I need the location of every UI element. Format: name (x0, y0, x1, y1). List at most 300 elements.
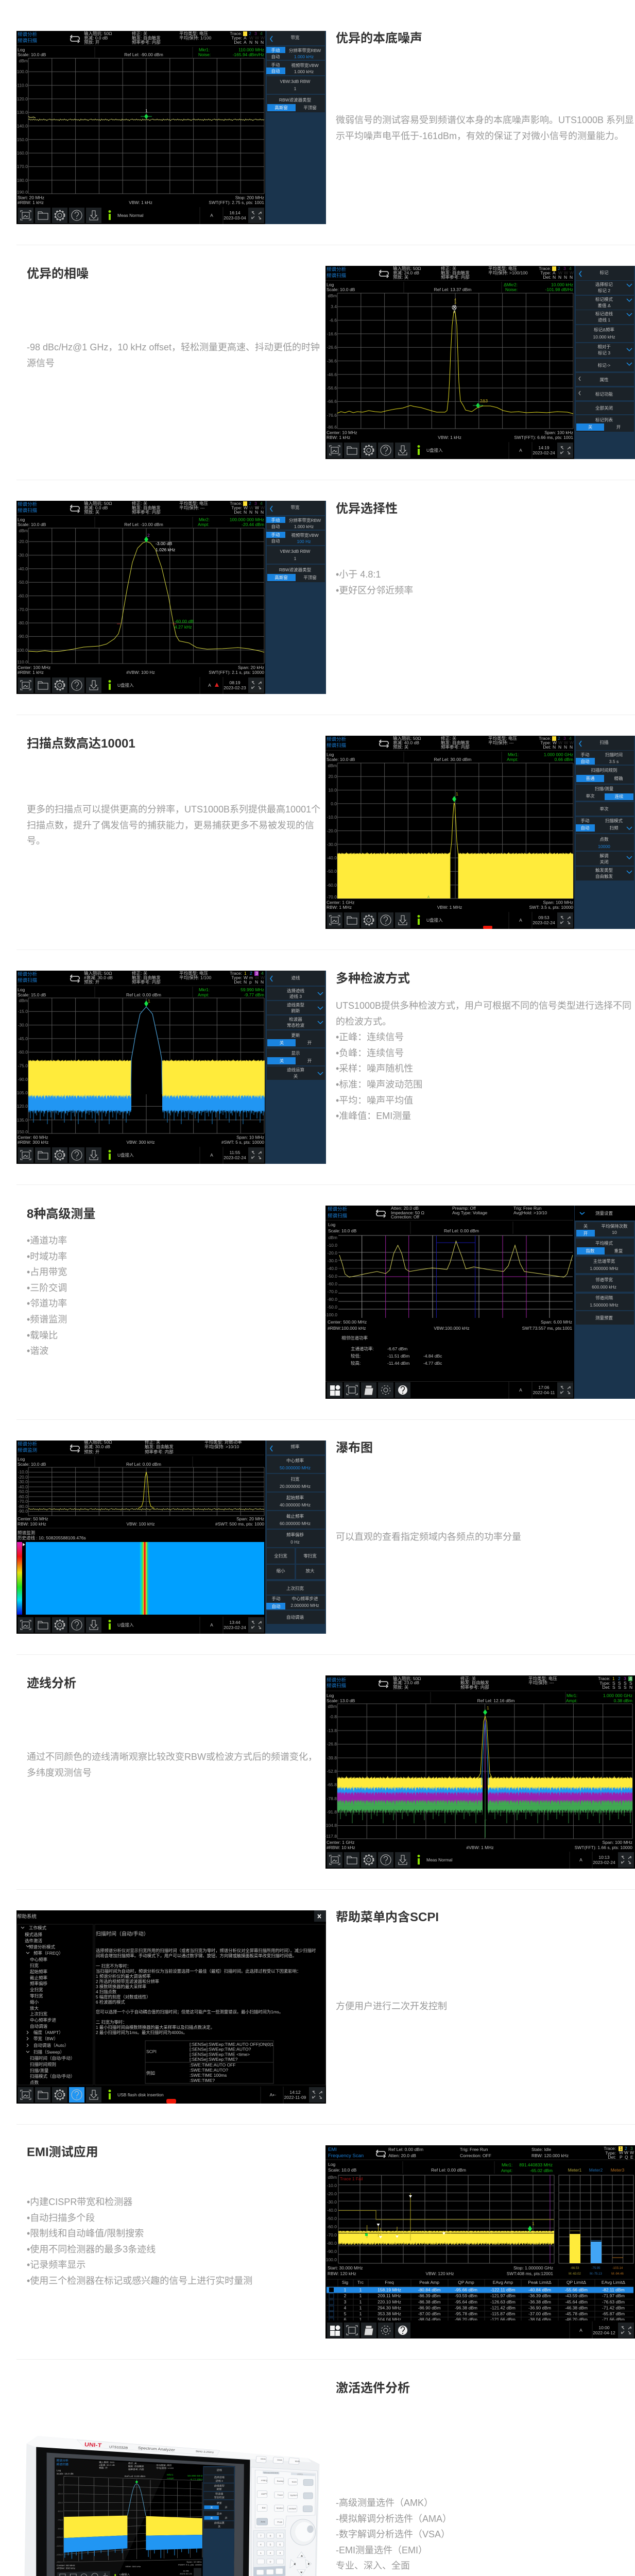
sidebar menu: 常态检波 (287, 1023, 304, 1028)
sidebar menu: 自动 (271, 524, 280, 529)
product screen sidebar: 显示 (217, 2513, 222, 2515)
header status: 修正: 关 (460, 1676, 476, 1681)
readout row (327, 1693, 632, 1703)
toolbar: 10:00 (598, 2325, 610, 2330)
header status: 输入阻抗: 50Ω (84, 31, 112, 36)
sidebar menu (574, 736, 635, 929)
spectrum plot: 1 (145, 108, 148, 113)
help tree: 扫描时间（自动/手动） (30, 2056, 75, 2061)
bottom readout: Start: 20 MHz (18, 195, 44, 200)
header status: 输入阻抗: 50Ω (393, 1676, 421, 1681)
header status: 频谱扫描 (18, 507, 38, 514)
help title bar: 帮助系统 (17, 1913, 37, 1920)
header status: W (619, 2150, 623, 2155)
header status: W (564, 740, 568, 745)
signal table: -71.42 dBm (602, 2305, 625, 2310)
help article: 2 最小扫描时间为1ms。最大扫描时间为4000s。 (96, 2030, 187, 2035)
header status (16, 1439, 264, 1467)
spectrum plot: 2Δ3 (480, 398, 488, 403)
header status (16, 31, 265, 58)
front keypad panel: Meas (261, 2458, 266, 2460)
sidebar menu: 频率偏移 (286, 1532, 304, 1537)
front keypad panel: Utility (297, 2473, 303, 2475)
toolbar (327, 2321, 634, 2338)
toolbar (327, 442, 573, 459)
spectrum plot with limit line: Trace 1 Fail (340, 2176, 363, 2181)
help article: 选择频谱分析仪对显示扫宽所用的扫描时间（或者当扫宽为零时，频谱分析仪对全屏幕扫描所用的时间）。减少扫描时 (96, 1948, 316, 1953)
sidebar menu: 属性 (599, 377, 609, 382)
spectrum plot: -3.00 dB (156, 541, 172, 546)
sidebar menu: 检波器 (289, 1017, 302, 1022)
bottom readout: 频谱监测 (18, 1530, 35, 1535)
toolbar: 16:14 (229, 210, 241, 215)
header status: Type: (231, 35, 242, 40)
help tree: 零扫宽 (30, 1993, 43, 1998)
toolbar: 2023-02-24 (533, 920, 555, 925)
signal table: Freq (385, 2280, 394, 2285)
header status: W (261, 35, 265, 40)
section 2 heading: 优异的相噪 (27, 267, 89, 281)
help tree: 模式选择 (25, 1932, 43, 1937)
product screen header text: Ref Lel: 0.00 dBm (125, 2476, 146, 2478)
brand plate: 9kHz-3.2GHz (196, 2450, 214, 2454)
toolbar: A (519, 448, 522, 453)
sidebar menu (574, 1206, 635, 1399)
product screen sidebar: 开 (225, 2517, 228, 2520)
bottom readout: #RBW: 1 kHz (18, 670, 44, 675)
help article: 4 扫描点数 (96, 1989, 117, 1994)
header status: 平均|保持: --- (488, 740, 514, 745)
spectrum plot: 4.27 kHz (175, 624, 192, 630)
front keypad panel: BW (262, 2506, 266, 2509)
help tree: 幅度（AMPT） (33, 2030, 63, 2035)
product screen spectrum: -60.0 (57, 2510, 63, 2512)
header status: Ref Lel: 0.00 dBm (388, 2147, 423, 2152)
spectrum plot: -90.0 (18, 1077, 28, 1082)
header status (325, 1206, 573, 1234)
header status: 频谱扫描 (327, 742, 347, 749)
toolbar: 2023-03-04 (224, 215, 246, 221)
front keypad panel: 1 (260, 2552, 262, 2555)
sidebar menu: 10 (612, 1230, 617, 1235)
toolbar (18, 1147, 264, 1164)
readout row: Log (328, 2162, 335, 2167)
header status: S (618, 1685, 621, 1690)
product screen header text: Log (57, 2469, 61, 2471)
toolbar: USB flash disk insertion (117, 2092, 164, 2097)
ACPR plot: -30.0 (328, 1258, 337, 1263)
sidebar menu: 主信道带宽 (593, 1259, 615, 1264)
signal table: -45.78 dBm (565, 2311, 588, 2316)
readout row: 891.440833 MHz (519, 2162, 553, 2167)
header status: 2 (625, 2146, 627, 2151)
header status: Type: (599, 1681, 610, 1686)
readout row (18, 1456, 161, 1467)
header status: 频谱扫描 (327, 1683, 347, 1689)
section 11 heading: 激活选件分析 (336, 2381, 410, 2395)
sidebar menu: 100 Hz (297, 539, 311, 544)
help article: 二 扫宽为零时： (96, 2020, 127, 2025)
section 1 heading: 优异的本底噪声 (336, 31, 422, 45)
signal table: -46.38 dBm (565, 2305, 588, 2310)
sidebar menu (574, 266, 635, 459)
header status: 平均|保持: 1/100 (179, 35, 211, 40)
sidebar menu: 1.000 kHz (294, 69, 314, 74)
sidebar menu: 标记 2 (598, 288, 610, 293)
sidebar menu: 自由触发 (595, 874, 613, 879)
signal table: -40.84 dBm (528, 2287, 551, 2293)
readout row: Ref Lel: 0.00 dBm (431, 2167, 466, 2173)
spectrum plot: dBm (19, 528, 28, 533)
spectrum plot: -39.8 (327, 1755, 337, 1760)
SCPI table: [:SENSe]:SWEep:TIME:AUTO? (190, 2046, 251, 2052)
spectrum plot: -56.6 (327, 385, 337, 391)
header status: 频率参考: 内部 (145, 1449, 174, 1454)
signal table: 2 (344, 2293, 347, 2298)
spectrum plot: -46.6 (327, 372, 337, 377)
sidebar menu: 解调 (599, 853, 609, 858)
product screen header text: 修正: 关 (128, 2462, 137, 2465)
screen: phase noise (325, 266, 635, 459)
bottom readout: SWT:408 ms, pts:12001 (507, 2271, 553, 2276)
header status: 1 (620, 2146, 622, 2151)
header status: A (553, 270, 556, 275)
readout row: Mkr1: (199, 47, 210, 53)
header status (16, 501, 265, 528)
header status: 4 (260, 31, 263, 36)
sidebar menu: 标记列表 (595, 417, 613, 422)
header status: 频谱扫描 (328, 1213, 348, 1219)
signal table: -95.66 dBm (455, 2287, 477, 2293)
signal table: 158.19 MHz (377, 2287, 401, 2293)
bottom readout: #RBW: 300 kHz (18, 1140, 48, 1145)
header status: Trace: (604, 2146, 616, 2151)
header status: 修正: 关 (441, 736, 457, 741)
header status: 平均|保持: --- (179, 505, 205, 510)
sidebar menu: 迹线运算 (287, 1067, 304, 1073)
sidebar menu: 手动 (271, 1596, 281, 1601)
header status: 频谱分析 (328, 1206, 348, 1212)
header status: 修正: 关 (441, 266, 457, 271)
header status: S (624, 1685, 627, 1690)
signal table: 1 (359, 2293, 362, 2298)
bottom readout: Center: 1 GHz (327, 1840, 354, 1845)
header status (325, 2146, 635, 2174)
signal table: -43.59 dBm (565, 2293, 588, 2298)
header status: 频谱分析 (18, 1441, 38, 1447)
bottom readout: 历史迹线 : 10; 508205588109.476s (18, 1535, 86, 1540)
header status: Det: (543, 744, 551, 750)
signal table: -65.87 dBm (602, 2311, 625, 2316)
bottom readout: Span: 100 kHz (544, 430, 573, 435)
header status: 预放: 开 (84, 979, 100, 985)
toolbar: 08:19 (229, 680, 241, 685)
header status: N (255, 510, 258, 515)
signal table: -126.63 dBm (490, 2299, 516, 2304)
readout row: Ref Lel: 30.00 dBm (434, 757, 471, 762)
waterfall display (17, 1542, 264, 1615)
header status: Type: (605, 2150, 616, 2156)
header status: 平均类型: 电压 (528, 1676, 557, 1681)
spectrum plot: -20.0 (18, 539, 28, 544)
SCPI table: SCPI (146, 2049, 157, 2054)
toolbar (327, 1852, 634, 1869)
header status: W (261, 505, 265, 510)
spectrum plot: -76.6 (327, 413, 337, 418)
product screen sidebar: 关 (210, 2516, 213, 2520)
spectrum plot: -26.8 (327, 1741, 337, 1747)
sidebar menu: 平顶窗 (303, 105, 317, 110)
header status: 频谱扫描 (18, 38, 38, 44)
readout row: Ampt: (198, 992, 209, 997)
bottom readout: #RBW: 10 kHz (327, 1845, 355, 1850)
screen: selectivity (16, 501, 326, 694)
toolbar: 10:13 (598, 1855, 610, 1860)
toolbar: A (208, 683, 211, 688)
header status: 修正: 关 (132, 971, 148, 976)
header status: Trace: (230, 501, 242, 506)
readout row: Mkr1: (567, 1693, 577, 1698)
bottom readout and results: 较高: (351, 1361, 361, 1366)
sidebar menu: 关 (280, 1058, 284, 1063)
header status: N (244, 510, 247, 515)
toolbar: Meas Normal (117, 213, 144, 218)
section 11 text: -高级测量选件（AMK） -模拟解调分析选件（AMA） -数字解调分析选件（VSA） -EMI测量选件（EMI） 专业、深入、全面 (336, 2498, 452, 2571)
header status: 频谱监测 (18, 1447, 37, 1453)
header status: S (612, 1681, 615, 1686)
signal table: -80.84 dBm (418, 2287, 441, 2293)
product screen header text: Ampt: (167, 2477, 174, 2480)
header status: 频谱扫描 (18, 977, 38, 984)
help tree: 扫描模式（自动/手动） (30, 2074, 75, 2079)
header status: 2 (618, 1676, 621, 1681)
signal table: -95.78 dBm (455, 2311, 477, 2316)
bottom readout and results: 较低: (351, 1353, 361, 1359)
section 3 text: •小于 4.8:1 •更好区分邻近频率 (336, 569, 413, 596)
readout row (328, 2162, 624, 2173)
header status: W (564, 270, 568, 275)
header status: Trace: (539, 266, 551, 271)
header status: W (255, 35, 259, 40)
header status: 频谱分析 (18, 971, 38, 977)
header status: W (249, 35, 253, 40)
sidebar menu: 手动 (271, 517, 280, 522)
product screen sidebar: 常态检波 (214, 2496, 225, 2499)
bottom readout and results: 相邻信道功率 (341, 1335, 368, 1341)
header status: Type: (540, 740, 551, 745)
help title bar (17, 1910, 326, 2085)
readout row (18, 47, 264, 57)
readout row: 1.000 000 GHz (603, 1693, 632, 1698)
sidebar menu: 起始频率 (286, 1495, 304, 1500)
sidebar menu: 扫描模式 (605, 818, 623, 823)
header status: EMI (328, 2147, 337, 2153)
spectrum plot: 0.0 (331, 801, 337, 806)
header status: 预放: 关 (393, 275, 409, 280)
toolbar: A (210, 1622, 213, 1628)
section 1 text: 微弱信号的测试容易受到频谱仪本身的本底噪声影响。UTS1000B 系列显 示平均噪声电平低于-161dBm，有效的保证了对微小信号的测量能力。 (336, 115, 634, 141)
sidebar menu: 关 (280, 1040, 284, 1045)
help tree: 自动调谐 (30, 2024, 48, 2029)
spectrum plot: -30.0 (18, 1479, 28, 1484)
bottom readout: RBW: 1 MHz (327, 905, 352, 910)
sidebar menu: 自动 (271, 54, 280, 59)
spectrum plot: -70.0 (18, 1499, 28, 1504)
spectrum plot: 20.0 (328, 774, 337, 779)
toolbar: 14:19 (538, 445, 550, 450)
readout row: 100.000 000 MHz (230, 517, 264, 522)
readout row: Ref Lel: 13.37 dBm (434, 287, 471, 292)
readout row: 0.66 dBm (555, 757, 573, 762)
header status: 触发: 自由触发 (132, 505, 161, 510)
help tree: 扫描/测量 (30, 2068, 49, 2073)
toolbar: 2023-02-24 (224, 1155, 246, 1160)
sidebar menu: 自动 (271, 69, 280, 74)
readout row: Ref Lel: -90.00 dBm (124, 52, 163, 57)
help article: 3 模数转换器的最大采样率 (96, 1984, 146, 1989)
header status: 频谱分析 (327, 1677, 347, 1683)
bottom readout (327, 1840, 632, 1850)
sidebar menu: 20.000000 MHz (280, 1484, 311, 1489)
front keypad panel: 5 (269, 2544, 271, 2546)
sidebar menu: 自动 (271, 1604, 281, 1609)
sidebar menu: 测量设置 (595, 1211, 613, 1216)
spectrum plot: 10.0 (328, 788, 337, 793)
signal table: Peak Amp (419, 2280, 439, 2285)
bottom readout: SWT(FFT): 6.66 ms, pts: 1001 (514, 435, 573, 440)
help tree: 起始频率 (30, 1969, 48, 1974)
help article: 间将会增加扫描频率。手动模式下，用户可以通过数字键、旋钮、方向键或触摸面板菜单改变扫描时间值。 (96, 1953, 297, 1958)
readout row (18, 987, 264, 997)
header status: 衰减: 23.0 dB (393, 1680, 419, 1685)
help article: 5 幅度的刻度（对数或线性） (96, 1994, 150, 1999)
header status: 3 (254, 31, 257, 36)
bottom readout: #VBW: 100 Hz (126, 670, 155, 675)
product screen sidebar: 刷新 (217, 2487, 222, 2491)
meter bars (559, 2175, 633, 2276)
header status: N (255, 979, 258, 985)
signal table: 3 (344, 2299, 347, 2304)
ACPR plot: -10.0 (328, 1243, 337, 1248)
signal table: -121.66 dBm (490, 2317, 516, 2322)
spectrum plot: -13.8 (327, 1728, 337, 1733)
front keypad panel: Default (289, 2507, 297, 2510)
header status: P (620, 2155, 623, 2160)
header status: N (261, 40, 264, 45)
spectrum plot: -70.0 (18, 607, 28, 612)
toolbar: A (519, 918, 522, 923)
sidebar menu: 自动 (580, 759, 590, 764)
front keypad panel: 7 (260, 2535, 262, 2537)
ACPR plot: -80.0 (328, 1297, 337, 1302)
section 6 text: •通道功率 •时域功率 •占用带宽 •三阶交调 •邻道功率 •频谱监测 •载噪比 •谐波 (27, 1235, 67, 1356)
sidebar menu: 指数 (586, 1248, 595, 1253)
header status: 3 (255, 971, 258, 976)
meter bars: M:-63.02 (569, 2273, 581, 2276)
bottom readout: RBW: 120 kHz (328, 2271, 356, 2276)
front keypad panel: 9 (279, 2535, 281, 2537)
sidebar menu: 相对于 (597, 344, 611, 349)
readout row: Scale: 10.0 dB (327, 757, 355, 762)
product screen sidebar: 关 (218, 2525, 221, 2529)
brand plate (77, 2440, 220, 2455)
header status: W (553, 740, 557, 745)
sidebar menu: 测量预置 (595, 1315, 613, 1320)
signal table: 6 (344, 2317, 347, 2322)
product screen header text: Mkr1: (167, 2474, 174, 2477)
signal table: -96.20 dBm (455, 2317, 477, 2322)
readout row: Mkr2: (199, 517, 210, 522)
header status: 平均类型: 电压 (488, 736, 517, 741)
spectrum plot with limit line: -20.0 (327, 2191, 337, 2196)
header status: m (249, 975, 253, 980)
toolbar (18, 1617, 264, 1634)
meter bars: -66.53 (570, 2267, 579, 2270)
spectrum plot: 2 (147, 533, 150, 538)
header status: S (629, 1681, 632, 1686)
spectrum plot with limit line: -50.0 (327, 2216, 337, 2221)
sidebar menu: 分辨率带宽RBW (289, 518, 321, 523)
header status: 频率参考: 内部 (441, 744, 470, 750)
spectrum plot: dBm (19, 998, 28, 1003)
product screen spectrum: #SWT: 5 s, pts: 10000 (178, 2564, 202, 2566)
readout row: 1.000 000 GHz (544, 752, 573, 757)
toolbar: 09:53 (538, 915, 550, 920)
spectrum plot with limit line: -60.0 (327, 2224, 337, 2229)
header status: 1 (244, 971, 247, 976)
sidebar menu: 平顶窗 (303, 575, 317, 580)
readout row: Meter1 (568, 2167, 581, 2173)
front keypad panel: Auto (261, 2520, 266, 2523)
toolbar: A (519, 1387, 522, 1393)
toolbar: A (210, 1153, 213, 1158)
sidebar menu: 开 (307, 1040, 312, 1045)
signal table: -36.38 dBm (528, 2299, 551, 2304)
toolbar: 2023-02-24 (533, 450, 555, 455)
bottom readout and results (328, 1319, 572, 1366)
front keypad panel: 8 (269, 2535, 271, 2537)
ACPR plot: -40.0 (328, 1266, 337, 1271)
header status: 1 (612, 1676, 615, 1681)
header status: N (558, 275, 561, 280)
spectrum plot: -30.0 (327, 842, 337, 847)
section 2 text: -98 dBc/Hz@1 GHz，10 kHz offset，轻松测量更高速、抖动更低的时钟 源信号 (27, 342, 320, 368)
spectrum plot: 3.4 (331, 304, 337, 309)
spectrum plot: -80.0 (18, 1504, 28, 1509)
meter bars: M:-94.46 (611, 2273, 624, 2276)
bottom readout and results: -4.84 dBc (423, 1353, 442, 1359)
sidebar menu: 扫描时间规则 (591, 768, 617, 773)
bottom readout and results: VBW:100.000 kHz (434, 1326, 470, 1331)
bottom readout (16, 1516, 264, 1540)
SCPI table: [:SENSe]:SWEep:TIME? (190, 2057, 238, 2062)
readout row: Log (18, 517, 25, 522)
signal table (325, 2279, 635, 2338)
header status: Type: (231, 975, 242, 980)
signal table: QP Amp (458, 2280, 474, 2285)
sidebar menu: 频率 (290, 1444, 300, 1449)
header status: 平均|保持: >100/100 (488, 270, 528, 275)
ACPR plot: -50.0 (328, 1274, 337, 1279)
help tree: 自动调谐（Auto） (33, 2043, 69, 2048)
screen: advanced measurement (325, 1206, 635, 1399)
sidebar menu: 迹线 (291, 975, 300, 980)
bottom readout: Stop: 1.000000 GHz (513, 2265, 553, 2270)
spectrum plot: -91.8 (327, 1809, 337, 1815)
sidebar menu: 标记功能 (595, 392, 613, 397)
SCPI table: :SWE:TIME:AUTO? (190, 2067, 228, 2073)
header status: 3 (630, 2146, 633, 2151)
